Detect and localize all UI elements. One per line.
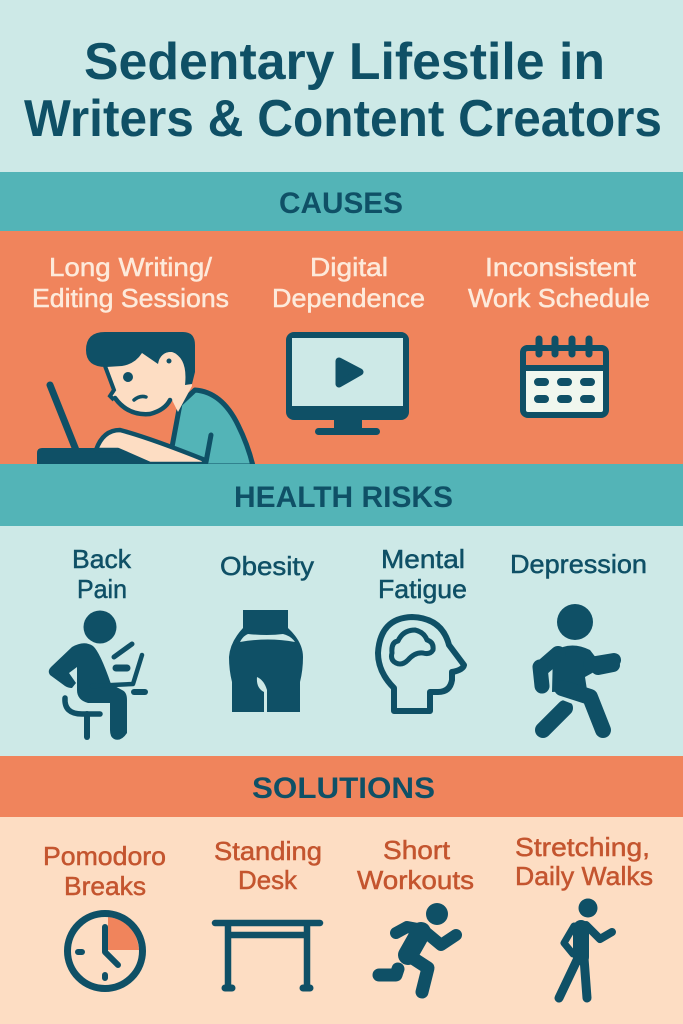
label: depression: Depression [510, 549, 647, 579]
health risks background [0, 526, 683, 756]
label: short workouts: Short [383, 835, 451, 865]
label: back pain: Pain [77, 574, 127, 604]
heading band: solutions: SOLUTIONS [252, 772, 435, 805]
heading band: health risks: HEALTH RISKS [234, 481, 453, 514]
panel: title [0, 0, 683, 172]
causes background [0, 231, 683, 464]
icon: video monitor [286, 332, 409, 435]
icon: hunched writer at laptop [37, 332, 253, 466]
icon: obesity torso [229, 610, 303, 712]
solutions background [0, 817, 683, 1024]
label: obesity: Obesity [220, 551, 314, 581]
label: long writing [32, 252, 229, 313]
icon: running figure [379, 903, 456, 992]
label: digital dependence: Dependence [272, 283, 425, 313]
label: inconsistent schedule: Work Schedule [468, 283, 650, 313]
icon: seated person with back pain [49, 610, 145, 740]
heading band: health risks [0, 464, 683, 526]
title line 2: Writers & Content Creators [24, 90, 662, 148]
icon: walking figure with stretch [559, 898, 612, 998]
label: pomodoro breaks: Breaks [64, 871, 146, 901]
label: standing desk [214, 836, 322, 895]
label: stretching and daily walks: Stretching, [515, 832, 650, 862]
title line 1: Sedentary Lifestile in [84, 33, 605, 91]
label: long writing: Editing Sessions [32, 283, 229, 313]
label: mental fatigue: Mental [381, 544, 465, 574]
icon: walking figure [540, 604, 614, 730]
label: long writing: Long Writing/ [49, 252, 213, 282]
heading band: causes [0, 172, 683, 231]
label: pomodoro breaks [43, 841, 166, 901]
label: back pain: Back [72, 544, 132, 574]
label: digital dependence [272, 252, 425, 313]
label: stretching and daily walks [515, 832, 653, 891]
icon: standing desk [215, 923, 320, 988]
panel: causes [0, 172, 683, 466]
icon: clock [68, 914, 142, 988]
heading band: causes: CAUSES [279, 187, 403, 220]
label: short workouts: Workouts [357, 865, 474, 895]
label: stretching and daily walks: Daily Walks [515, 861, 653, 891]
label: mental fatigue: Fatigue [378, 574, 467, 604]
label: back pain [72, 544, 132, 604]
heading band: solutions [0, 756, 683, 817]
label: pomodoro breaks: Pomodoro [43, 841, 166, 871]
label: digital dependence: Digital [310, 252, 388, 282]
panel: solutions [0, 756, 683, 1024]
label: inconsistent schedule [468, 252, 650, 313]
label: short workouts [357, 835, 474, 895]
icon: calendar [522, 339, 606, 415]
label: inconsistent schedule: Inconsistent [485, 252, 637, 282]
icon: head with brain [378, 617, 464, 711]
panel: health risks [0, 464, 683, 756]
label: standing desk: Standing [214, 836, 322, 866]
label: mental fatigue [378, 544, 467, 604]
label: standing desk: Desk [238, 865, 298, 895]
